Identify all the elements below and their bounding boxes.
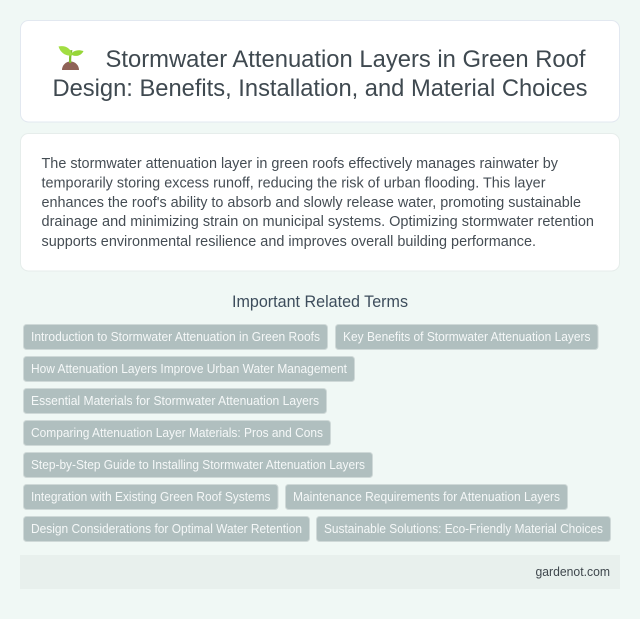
chip: essential materials: Essential Materials for Stormwater Attenuation Layers (31, 394, 319, 408)
panel: title card (20, 20, 620, 122)
chip: maintenance (286, 484, 568, 510)
chip: introduction: Introduction to Stormwater Attenuation in Green Roofs (31, 330, 320, 344)
chip: sustainable solutions (316, 516, 610, 542)
chip: maintenance: Maintenance Requirements for Attenuation Layers (293, 490, 560, 504)
panel: related term chips (24, 324, 610, 542)
description text: enhances the roof's ability to absorb and slowly release water, promoting sustainable (42, 195, 581, 211)
chip: design considerations (24, 516, 310, 542)
footer source text: gardenot.com (536, 564, 610, 579)
description text: supports environmental resilience and improves overall building performance. (42, 234, 536, 250)
chip: key benefits: Key Benefits of Stormwater Attenuation Layers (343, 330, 590, 344)
panel: description card (20, 134, 620, 271)
title text (52, 46, 588, 102)
chip: essential materials (24, 388, 326, 414)
description text: drainage and minimizing strain on municipal systems. Optimizing stormwater retention (42, 214, 594, 230)
title text: Design: Benefits, Installation, and Material Choices (52, 75, 588, 102)
title text: Stormwater Attenuation Layers in Green Roof (106, 46, 586, 73)
footer band (20, 555, 620, 589)
chip: step-by-step guide (24, 452, 372, 478)
heading: important related terms: Important Related Terms (232, 293, 408, 311)
chip: urban water management (24, 356, 354, 382)
description text (42, 156, 594, 250)
chip: introduction (24, 324, 328, 350)
chip: key benefits (336, 324, 598, 350)
description text: The stormwater attenuation layer in green roofs effectively manages rainwater by (42, 156, 559, 172)
description text: temporarily storing excess runoff, reducing the risk of urban flooding. This layer (42, 176, 546, 192)
chip: urban water management: How Attenuation Layers Improve Urban Water Management (31, 362, 347, 376)
icon: seedling (58, 46, 84, 70)
chip: integration: Integration with Existing Green Roof Systems (31, 490, 270, 504)
chip: sustainable solutions: Sustainable Solutions: Eco-Friendly Material Choices (324, 522, 603, 536)
chip: step-by-step guide: Step-by-Step Guide to Installing Stormwater Attenuation Layers (31, 458, 365, 472)
chip: comparing materials: Comparing Attenuation Layer Materials: Pros and Cons (31, 426, 323, 440)
chip: integration (24, 484, 278, 510)
chip: design considerations: Design Considerations for Optimal Water Retention (31, 522, 302, 536)
chip: comparing materials (24, 420, 330, 446)
